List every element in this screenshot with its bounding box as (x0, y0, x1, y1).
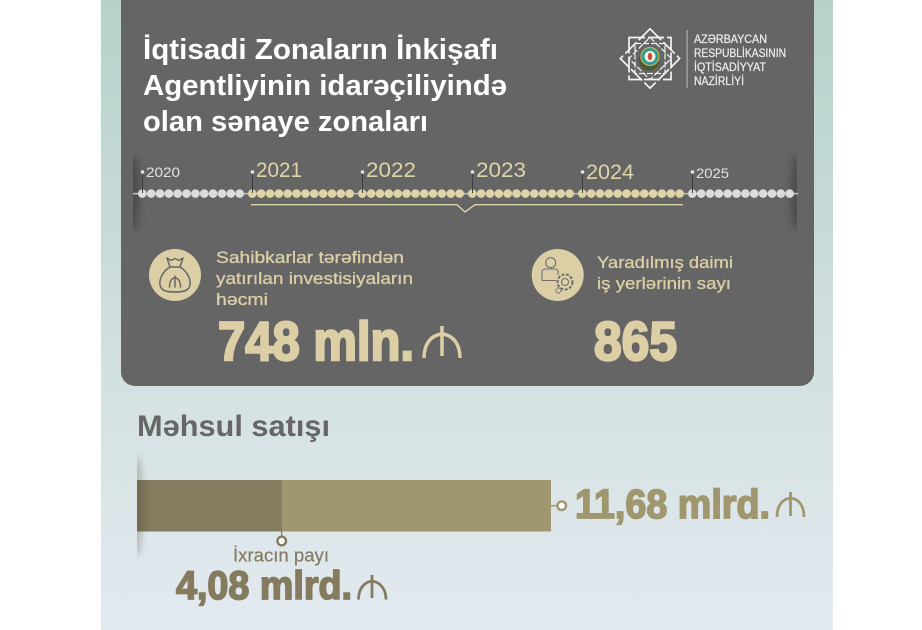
jobs label (597, 253, 733, 293)
year labels: 2025 (696, 165, 729, 181)
investment label: yatırılan investisiyaların (216, 269, 413, 288)
investment label: Sahibkarlar tərəfindən (216, 248, 404, 267)
investment label: həcmi (216, 290, 268, 309)
jobs label: iş yerlərinin sayı (597, 274, 731, 293)
icon: manat sign (777, 492, 804, 517)
year labels (146, 159, 729, 184)
year ticks (141, 170, 694, 193)
title (143, 34, 507, 138)
icon: worker with gear (532, 249, 584, 301)
icon: manat sign (358, 575, 386, 600)
year labels: 2022 (366, 159, 416, 182)
title: olan sənaye zonaları (143, 106, 428, 138)
total sales bar (137, 480, 551, 532)
background panel (101, 0, 833, 630)
ministry logo (620, 29, 786, 88)
investment label (216, 248, 413, 309)
logo text: NAZİRLİYİ (694, 74, 744, 88)
logo text: RESPUBLİKASININ (694, 46, 786, 60)
jobs value: 865 (594, 310, 677, 372)
icon: manat sign (424, 326, 460, 358)
year labels: 2020 (146, 164, 180, 180)
timeline dots (142, 189, 791, 198)
export share bar (137, 480, 282, 532)
sales bar chart (131, 456, 551, 556)
year labels: 2024 (586, 161, 634, 184)
logo text: İQTİSADİYYAT (694, 60, 767, 74)
logo text (694, 32, 786, 88)
dark header panel (121, 0, 814, 386)
logo text: AZƏRBAYCAN (694, 32, 767, 46)
export callout (176, 531, 386, 608)
icon: money bag (149, 249, 201, 301)
title: İqtisadi Zonaların İnkişafı (143, 34, 498, 66)
divider (686, 30, 688, 88)
jobs label: Yaradılmış daimi (597, 253, 733, 272)
year labels: 2021 (256, 159, 302, 182)
export callout: İxracın payı (233, 546, 329, 566)
icon: star emblem (620, 29, 680, 88)
bracket (251, 205, 683, 212)
total callout: 11,68 mlrd. (575, 481, 770, 527)
export callout: 4,08 mlrd. (176, 564, 352, 608)
sales heading: Məhsul satışı (137, 410, 330, 443)
investment value: 748 mln. (218, 310, 414, 372)
year labels: 2023 (476, 159, 526, 182)
title: Agentliyinin idarəçiliyində (143, 70, 507, 102)
timeline (126, 155, 804, 231)
